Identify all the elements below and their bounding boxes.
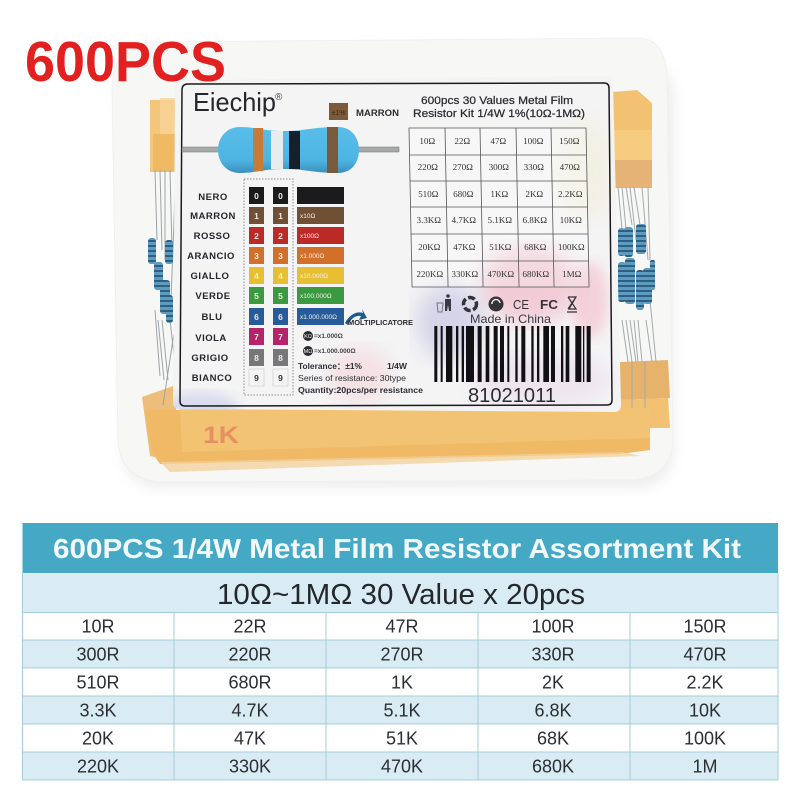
table values: 3.3K — [79, 700, 117, 720]
left tape strips — [150, 98, 178, 172]
resistance value grid: 510Ω — [418, 189, 439, 199]
multiplier bars: x10Ω — [300, 213, 315, 220]
tolerance swatch: MARRON — [356, 108, 399, 118]
resistance value grid — [409, 128, 589, 287]
table values: 300R — [76, 644, 120, 664]
table values: 270R — [380, 644, 424, 664]
icon: green dot — [488, 296, 504, 312]
table header: 600PCS 1/4W Metal Film Resistor Assortment Kit — [53, 533, 741, 564]
multiplier bars: x100.000Ω — [300, 293, 332, 300]
table values: 220R — [228, 644, 272, 664]
resistors right — [618, 224, 655, 310]
kilo ohm note: KΩ — [304, 334, 312, 340]
resistance value grid: 3.3KΩ — [416, 215, 441, 225]
multiplier bars: x100Ω — [300, 233, 319, 240]
color code digit column one: 6 — [254, 312, 259, 322]
dotted digit frame — [244, 179, 293, 395]
color code digit column two: 3 — [278, 251, 283, 261]
bottom paper tapes: 1K — [203, 422, 240, 449]
resistance value grid: 5.1KΩ — [487, 215, 512, 225]
table values: 680R — [228, 672, 272, 692]
table values: 680K — [532, 756, 574, 776]
multiplier bars: x10.000Ω — [300, 273, 328, 280]
resistance value grid: 22Ω — [454, 136, 470, 146]
color code digit column two: 1 — [278, 211, 283, 221]
multiplier bars: x1.000Ω — [300, 253, 325, 260]
color code digit column two: 9 — [278, 373, 283, 383]
color code digit column one: 9 — [254, 373, 259, 383]
kit title: Resistor Kit 1/4W 1%(10Ω-1MΩ) — [413, 108, 585, 120]
resistance value grid: 4.7KΩ — [451, 215, 476, 225]
mega ohm note: MΩ — [304, 349, 312, 355]
panel: resistor assortment table — [22, 523, 778, 780]
specification text: 1/4W — [387, 361, 408, 371]
pastel watercolor background — [162, 120, 613, 424]
color code labels: ROSSO — [194, 231, 230, 242]
table grid — [22, 573, 778, 780]
resistance value grid: 680KΩ — [522, 269, 550, 279]
table values: 51K — [386, 728, 418, 748]
resistance value grid: 270Ω — [453, 162, 473, 172]
specification text: Series of resistance: 30type — [298, 373, 406, 383]
table values: 4.7K — [231, 700, 269, 720]
resistance value grid: 20KΩ — [418, 242, 441, 252]
resistance value grid: 10Ω — [419, 136, 435, 146]
table values: 1K — [391, 672, 413, 692]
color code digit column two: 4 — [278, 271, 283, 281]
panel: plastic storage box with resistors — [112, 38, 674, 488]
kit title: 600pcs 30 Values Metal Film — [421, 95, 573, 107]
specification text: Quantity:20pcs/per resistance — [298, 385, 423, 395]
color code labels: NERO — [198, 192, 228, 203]
icon: CE mark: CE — [513, 297, 529, 312]
table subheader — [22, 573, 778, 612]
brand logo: ® — [275, 92, 283, 103]
specification text: Tolerance：±1% — [298, 361, 362, 371]
resistance value grid: 51KΩ — [489, 242, 512, 252]
table values: 100R — [531, 616, 575, 636]
resistance value grid: 220Ω — [418, 162, 438, 172]
resistance value grid: 470KΩ — [487, 269, 515, 279]
table values: 100K — [684, 728, 726, 748]
color code labels: ARANCIO — [187, 251, 235, 262]
table values: 510R — [76, 672, 120, 692]
specification text — [298, 361, 423, 395]
kilo ohm note — [303, 331, 343, 341]
color code digit column two: 2 — [278, 231, 283, 241]
table header — [22, 523, 778, 573]
table values: 220K — [77, 756, 119, 776]
icon: crossed bin — [567, 297, 577, 312]
color code digit column one: 8 — [254, 353, 259, 363]
table values: 2.2K — [686, 672, 724, 692]
color code digit column one — [249, 187, 264, 386]
resistance value grid: 47KΩ — [453, 242, 476, 252]
brand logo: Eiechip — [193, 87, 276, 117]
tolerance swatch — [329, 103, 399, 120]
color code labels: BIANCO — [192, 373, 232, 384]
color code labels — [187, 192, 236, 384]
multiplier arrow and label — [345, 309, 413, 327]
table values: 330R — [531, 644, 575, 664]
mega ohm note: =x1.000.000Ω — [314, 348, 356, 355]
table values: 330K — [229, 756, 271, 776]
table values — [76, 616, 727, 776]
color code labels: MARRON — [190, 211, 236, 222]
table values: 150R — [683, 616, 727, 636]
icon: recycle — [464, 298, 476, 310]
table values: 1M — [692, 756, 718, 776]
color code digit column one: 2 — [254, 231, 259, 241]
resistance value grid: 680Ω — [453, 189, 474, 199]
color code digit column two — [273, 187, 288, 386]
resistance value grid: 47Ω — [490, 136, 506, 146]
compliance icons — [437, 294, 577, 312]
resistance value grid: 300Ω — [489, 162, 509, 172]
color code digit column one: 0 — [254, 191, 259, 201]
resistance value grid: 330KΩ — [451, 269, 479, 279]
table values: 2K — [542, 672, 564, 692]
illustration: resistor with color bands — [182, 127, 399, 173]
multiplier bars — [297, 187, 344, 325]
resistance value grid: 2KΩ — [525, 189, 544, 199]
table values: 22R — [233, 616, 267, 636]
icon: FCC mark: FC — [540, 297, 559, 312]
resistor wires right — [618, 187, 656, 410]
kit title — [413, 95, 585, 120]
resistance value grid: 150Ω — [559, 136, 580, 146]
resistance value grid: 100Ω — [523, 136, 544, 146]
table row stripes — [22, 640, 778, 780]
table values: 47R — [385, 616, 419, 636]
resistance value grid: 470Ω — [560, 162, 580, 172]
table values: 20K — [82, 728, 114, 748]
resistance value grid: 220KΩ — [416, 269, 444, 279]
resistance value grid: 330Ω — [524, 162, 544, 172]
resistance value grid: 1KΩ — [490, 189, 509, 199]
color code labels: VIOLA — [195, 333, 227, 344]
color code digit column one: 4 — [254, 271, 259, 281]
lower left tape strips — [142, 385, 176, 462]
table values: 470K — [381, 756, 423, 776]
multiplier arrow and label: MOLTIPLICATORE — [348, 318, 413, 327]
resistance value grid: 100KΩ — [558, 242, 585, 252]
mega ohm note — [303, 346, 356, 356]
multiplier bars: x1.000.000Ω — [300, 314, 337, 321]
lower right tape strips — [620, 360, 670, 450]
bottom paper tapes — [146, 408, 650, 472]
panel: product label card — [162, 76, 621, 424]
color code digit column two: 6 — [278, 312, 283, 322]
color code digit column two: 8 — [278, 353, 283, 363]
kilo ohm note: =x1.000Ω — [314, 333, 343, 340]
icon: waste person — [437, 294, 451, 312]
table values: 470R — [683, 644, 727, 664]
color code digit column one: 1 — [254, 211, 259, 221]
tolerance swatch: ±1% — [332, 110, 345, 117]
barcode number: 81021011 — [468, 385, 556, 407]
made in china: Made in China — [470, 312, 551, 326]
resistance value grid: 68KΩ — [524, 242, 547, 252]
color code labels: BLU — [201, 312, 223, 323]
table values: 5.1K — [383, 700, 421, 720]
table values: 6.8K — [534, 700, 572, 720]
color code digit column one: 5 — [254, 291, 259, 301]
resistors left — [148, 238, 173, 323]
color code labels: GRIGIO — [191, 353, 229, 364]
resistance value grid: 6.8KΩ — [522, 215, 547, 225]
title: 600PCS: 600PCS — [25, 30, 226, 94]
color code digit column two: 5 — [278, 291, 283, 301]
resistance value grid: 1MΩ — [562, 269, 582, 279]
resistance value grid: 2.2KΩ — [558, 189, 583, 199]
color code digit column one: 7 — [254, 332, 259, 342]
box body — [112, 38, 673, 482]
table subheader: 10Ω~1MΩ 30 Value x 20pcs — [217, 579, 585, 611]
color code labels: GIALLO — [191, 271, 229, 282]
color code digit column one: 3 — [254, 251, 259, 261]
barcode — [434, 326, 591, 382]
table values: 10R — [81, 616, 115, 636]
resistor wires left — [155, 170, 178, 405]
right tape strips — [612, 90, 652, 188]
resistance value grid: 10KΩ — [560, 215, 582, 225]
color code digit column two: 7 — [278, 332, 283, 342]
color code digit column two: 0 — [278, 191, 283, 201]
table values: 10K — [689, 700, 721, 720]
table values: 68K — [537, 728, 569, 748]
table values: 47K — [234, 728, 266, 748]
color code labels: VERDE — [195, 291, 231, 302]
card border — [180, 83, 612, 406]
